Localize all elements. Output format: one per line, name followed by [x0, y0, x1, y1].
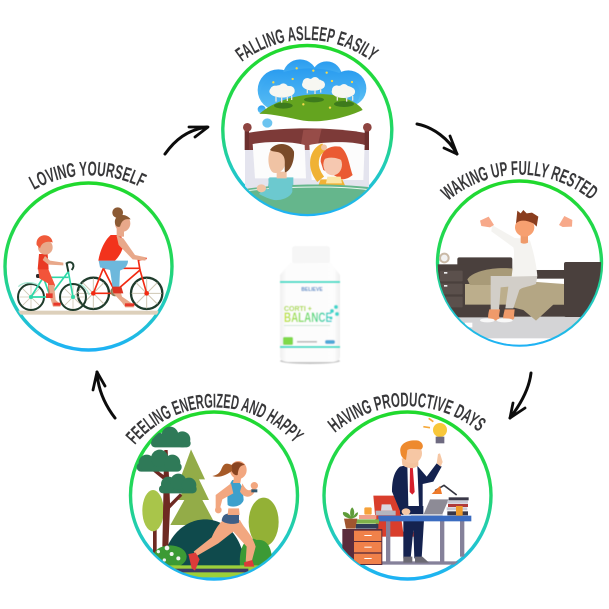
- ring: [438, 181, 602, 345]
- blanket: [247, 184, 369, 214]
- man: [268, 177, 294, 186]
- arrow: to falling asleep: [165, 127, 208, 154]
- lamp: [435, 485, 457, 495]
- bushes: [240, 539, 272, 567]
- bed frame: [245, 148, 369, 192]
- headboard: [246, 128, 368, 150]
- bottle shadow: [280, 358, 340, 364]
- runner: [194, 518, 256, 562]
- heading: falling asleep easily: FALLING ASLEEP EASILY: [234, 26, 380, 62]
- illustration: sleeping couple with sheep dream: [243, 59, 372, 220]
- dark hill: [162, 519, 245, 567]
- hands: [480, 217, 494, 227]
- dark trunk and branches: [153, 450, 182, 547]
- light bulb: [423, 418, 447, 443]
- molecule icon: [329, 305, 339, 320]
- heading: having productive days: HAVING PRODUCTIVE DAYS: [327, 392, 486, 432]
- label bars: [280, 281, 340, 283]
- arrow: to loving yourself: [93, 372, 115, 418]
- sheep: [269, 77, 355, 98]
- stacked books: [449, 497, 469, 500]
- arrow: to waking up: [417, 124, 457, 154]
- child: [36, 274, 46, 278]
- bottle body: [280, 263, 340, 362]
- brand: BELIEVE: [301, 287, 323, 293]
- ring: [130, 412, 298, 579]
- laptop: [423, 499, 449, 515]
- small thought bubbles: [262, 118, 272, 128]
- illustration: businessman at desk: [342, 418, 471, 565]
- right round tree: [249, 498, 279, 546]
- floor: [458, 316, 581, 345]
- mother: [99, 261, 128, 287]
- businessman: [403, 520, 424, 558]
- child bicycle: [18, 262, 89, 310]
- desk top: [378, 516, 471, 521]
- thought cloud: [258, 59, 366, 118]
- ground: [155, 565, 272, 577]
- illustration: man stretching on bed: [437, 210, 602, 348]
- tree foliage: [137, 427, 197, 493]
- plant and books: [356, 524, 378, 529]
- product name: CORTI +: [284, 306, 312, 313]
- woman: [314, 147, 324, 179]
- clock: [439, 253, 450, 263]
- man: [491, 276, 537, 310]
- heading: loving yourself: LOVING YOURSELF: [28, 162, 148, 190]
- illustration: woman running in forest: [137, 427, 279, 577]
- heading: feeling energized and happy: FEELING ENERGIZED AND HAPPY: [125, 394, 304, 444]
- mother bicycle: [78, 258, 162, 309]
- nightstand: [438, 264, 458, 317]
- panel: having productive days: [322, 392, 493, 581]
- man's arm on blanket: [259, 178, 292, 200]
- shoes: [188, 553, 200, 571]
- panel: falling asleep easily: [221, 26, 394, 216]
- badges: [283, 337, 293, 345]
- ring: [324, 412, 491, 579]
- headboard: [457, 257, 512, 317]
- panel: waking up fully rested: [436, 161, 604, 347]
- mattress and blanket: [465, 284, 564, 305]
- pillows: [253, 142, 306, 178]
- desk legs and floor bar: [386, 520, 390, 563]
- product bottle: [280, 246, 340, 364]
- panel: feeling energized and happy: [125, 394, 304, 581]
- product name: [284, 306, 332, 325]
- chair: [373, 496, 403, 533]
- cabinet: [342, 529, 382, 565]
- ring: [223, 46, 392, 214]
- illustration: mother and child cycling: [18, 207, 162, 315]
- ring: [5, 183, 172, 350]
- bottle cap: [292, 246, 330, 264]
- product name: BALANCE: [284, 310, 332, 325]
- pine tree: [170, 449, 216, 525]
- panel: loving yourself: [3, 162, 174, 352]
- arrow: to productive days: [510, 373, 531, 418]
- ground: [18, 311, 158, 315]
- left round tree: [153, 527, 157, 553]
- heading: waking up fully rested: WAKING UP FULLY RESTED: [440, 161, 598, 200]
